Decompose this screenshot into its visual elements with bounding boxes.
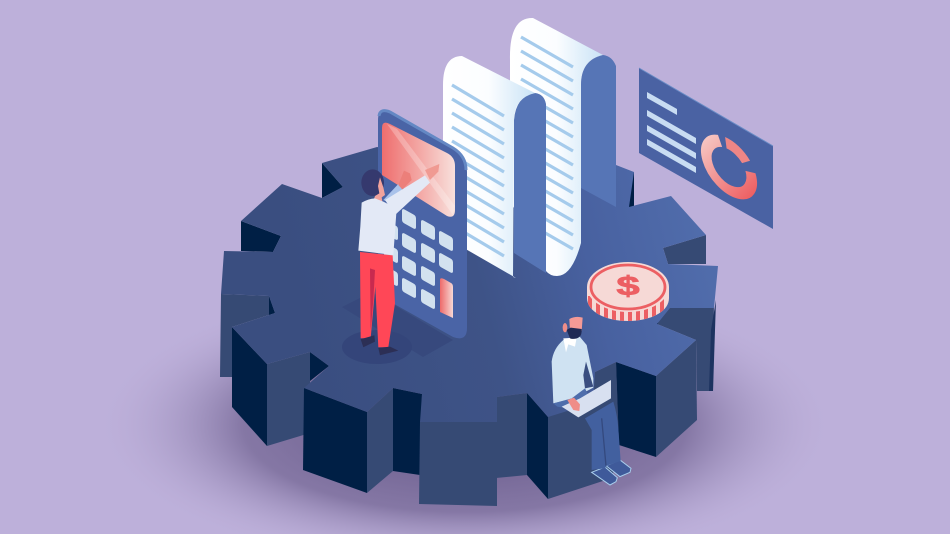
far shoe <box>606 460 631 477</box>
coin face <box>587 262 669 312</box>
panel text lines <box>647 92 696 173</box>
panel top edge <box>639 68 773 146</box>
receipt back: printed lines <box>521 37 573 249</box>
coin edge <box>587 287 669 321</box>
receipt: back <box>510 18 616 276</box>
donut chart <box>700 121 758 213</box>
coin ring <box>591 265 665 309</box>
standing man floor ellipse <box>342 330 412 364</box>
face and neck <box>373 177 385 203</box>
calculator screen <box>382 123 455 217</box>
laptop <box>562 380 611 417</box>
inner arm shadow <box>583 362 593 388</box>
coin dollar sign: $ <box>616 271 640 301</box>
right arm <box>385 175 430 215</box>
receipt back: paper face <box>510 18 603 276</box>
gear side faces <box>220 163 716 506</box>
info panel <box>639 68 773 229</box>
gear top face <box>221 147 718 422</box>
receipt: front <box>443 56 546 278</box>
cuff <box>553 388 588 408</box>
collar <box>563 338 577 352</box>
left hand <box>398 171 412 189</box>
calculator shadow <box>342 292 453 357</box>
calculator top edge <box>379 111 466 170</box>
torso <box>552 335 593 403</box>
screen glare <box>387 124 455 215</box>
hair <box>361 169 384 196</box>
calculator red key <box>440 278 453 318</box>
legs <box>585 402 621 470</box>
beard <box>567 328 582 339</box>
receipt front: paper face <box>443 56 535 278</box>
hand <box>567 398 580 411</box>
trouser shadow <box>370 268 375 330</box>
calculator <box>378 111 467 338</box>
leg separation <box>602 418 606 466</box>
isometric finance illustration <box>151 18 778 534</box>
torso <box>358 198 397 255</box>
seated man <box>552 317 631 485</box>
receipt front: curled side <box>514 93 546 273</box>
calculator keys <box>384 208 453 310</box>
coin <box>587 262 669 322</box>
near shoe <box>592 467 617 485</box>
ear <box>563 323 567 332</box>
receipt back: curled side <box>581 55 616 207</box>
shoe left <box>361 335 375 347</box>
panel board <box>639 68 773 229</box>
standing man <box>358 164 439 355</box>
trousers <box>360 252 395 347</box>
right hand <box>425 164 439 180</box>
receipt front: printed lines <box>452 85 504 256</box>
coin edge ridges <box>588 296 664 322</box>
head <box>569 317 583 331</box>
calculator body <box>378 111 467 338</box>
shoe right <box>378 347 398 355</box>
left sleeve <box>383 184 402 203</box>
ground shadow <box>95 280 835 534</box>
